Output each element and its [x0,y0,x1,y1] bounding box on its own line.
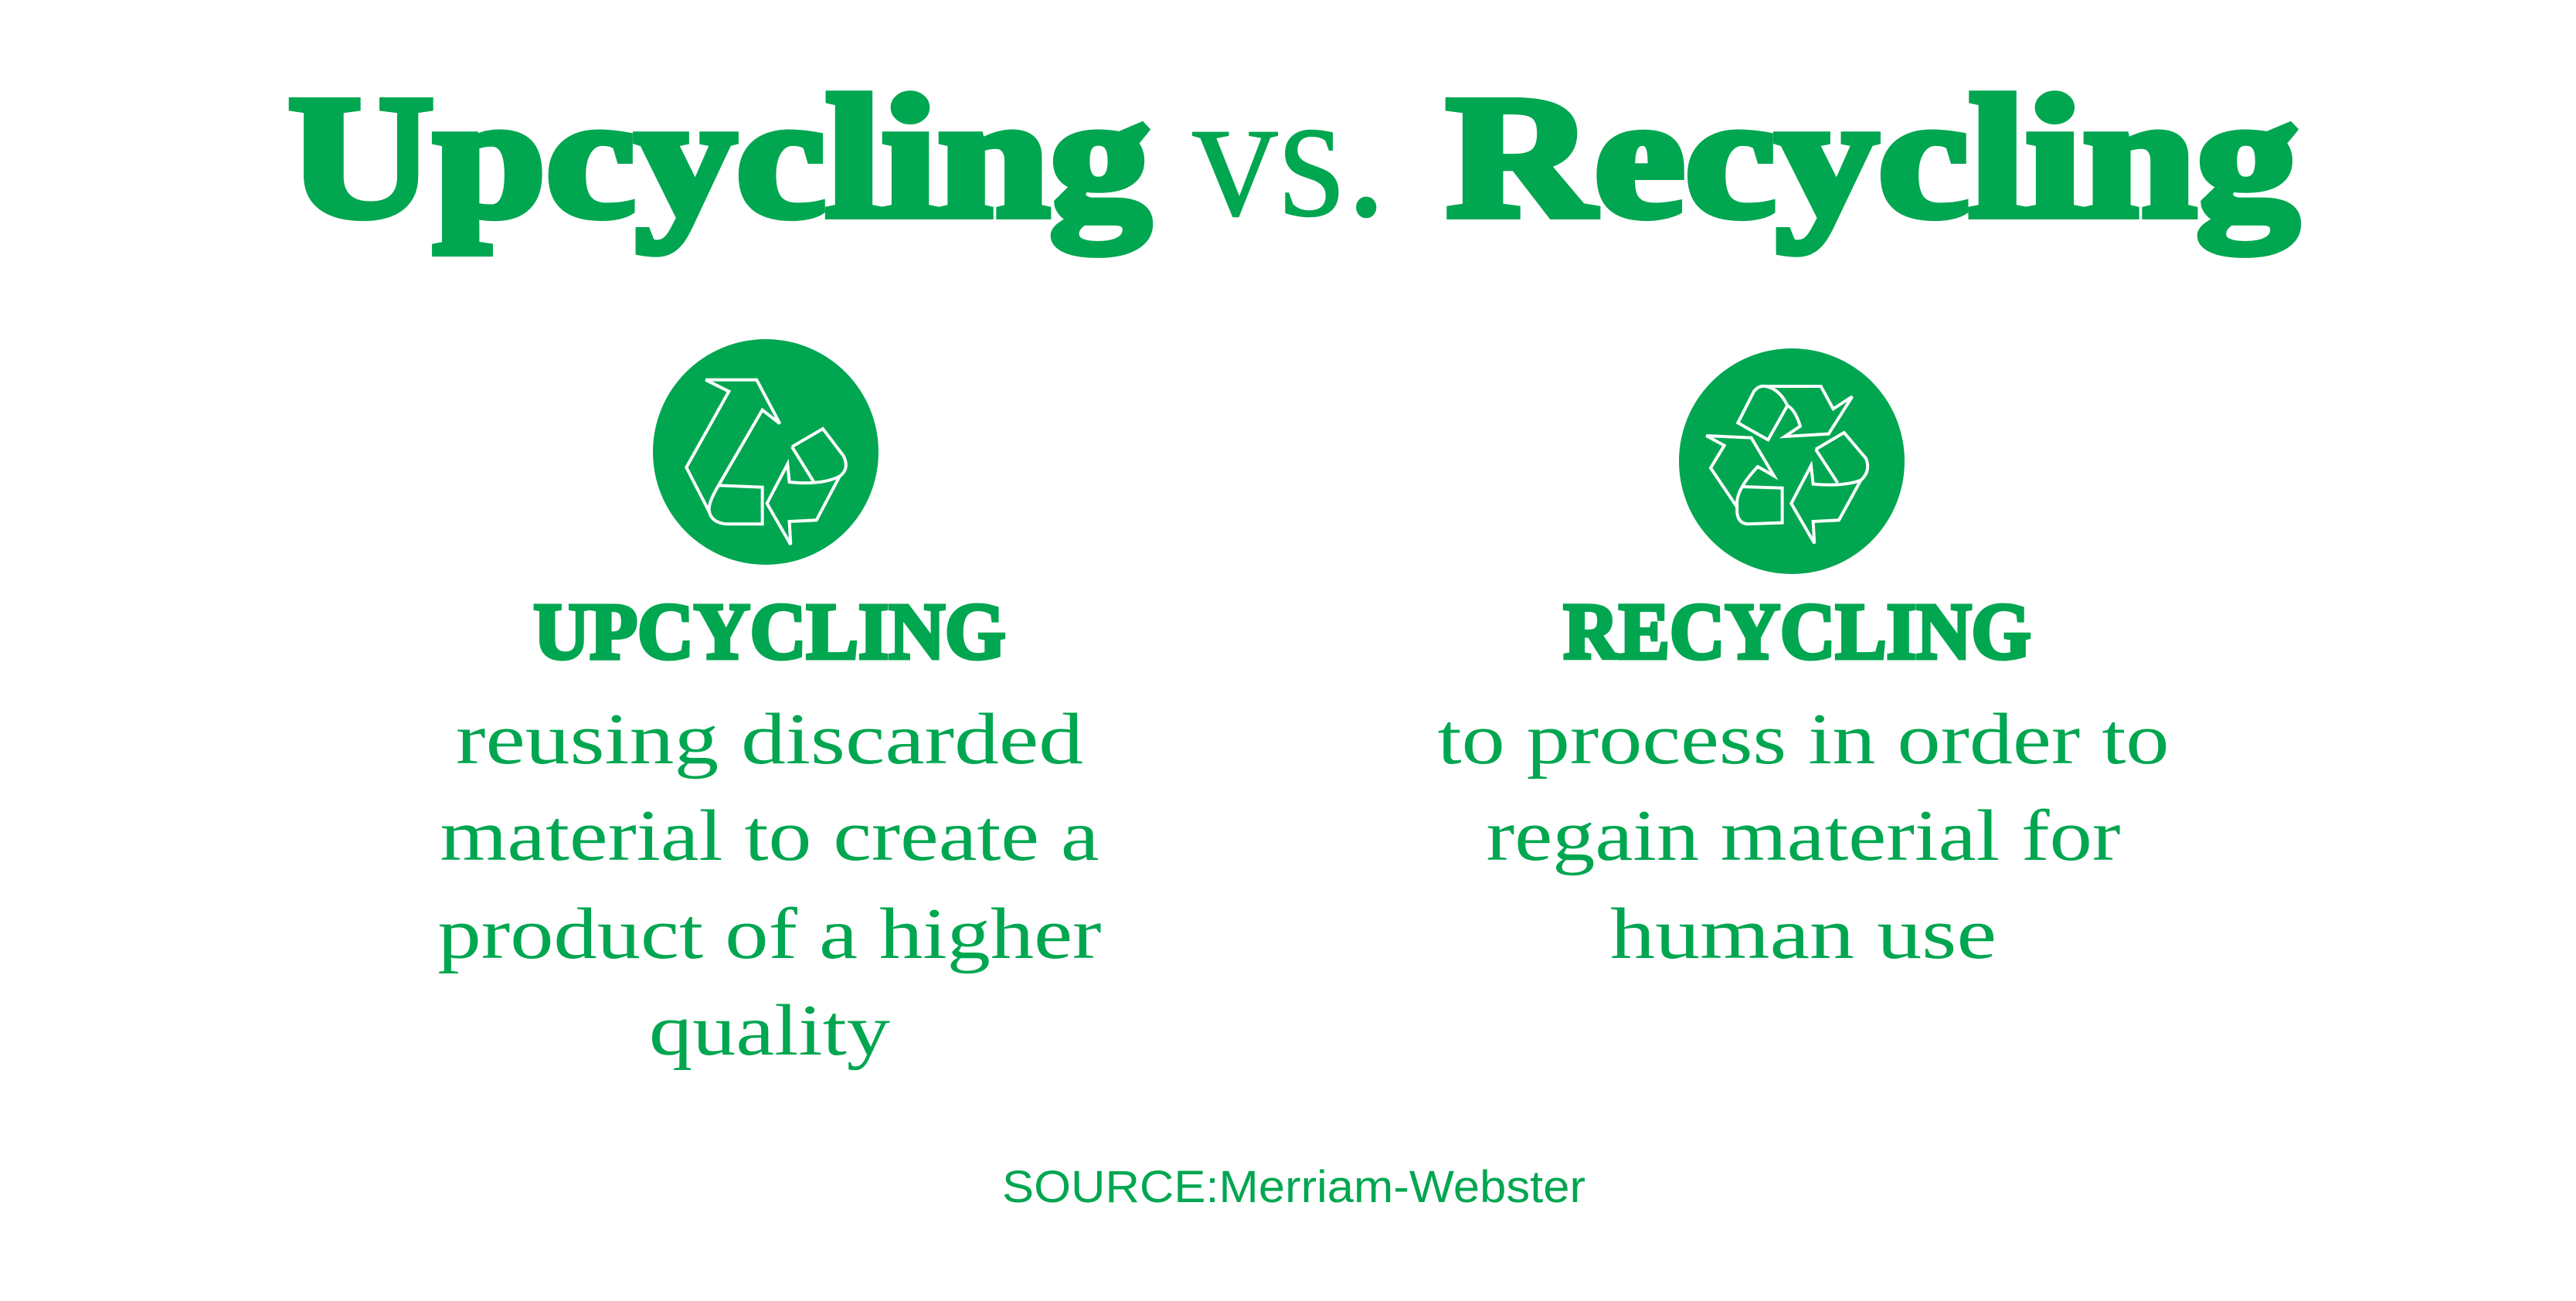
text block: upcycling definition: product of a higher [437,894,1102,974]
title: Recycling [1446,60,2299,254]
title [288,54,2299,256]
heading: recycling: RECYCLING [1564,587,2031,676]
text block: upcycling definition: quality [649,990,890,1071]
icon: recycling [1679,348,1905,574]
text block: recycling definition [1437,699,2170,974]
text block: recycling definition: regain material for [1487,796,2120,876]
text block: recycling definition: human use [1610,894,1997,974]
heading: upcycling: UPCYCLING [533,587,1006,676]
text block: upcycling definition: reusing discarded [456,699,1083,780]
text block: recycling definition: to process in order to [1437,699,2170,780]
icon: upcycling [653,339,878,565]
text block: upcycling definition: material to create a [440,796,1099,876]
title: vs. [1192,54,1388,256]
source: SOURCE:Merriam-Webster [1002,1162,1585,1212]
title: Upcycling [288,60,1150,254]
text block: upcycling definition [437,699,1102,1071]
